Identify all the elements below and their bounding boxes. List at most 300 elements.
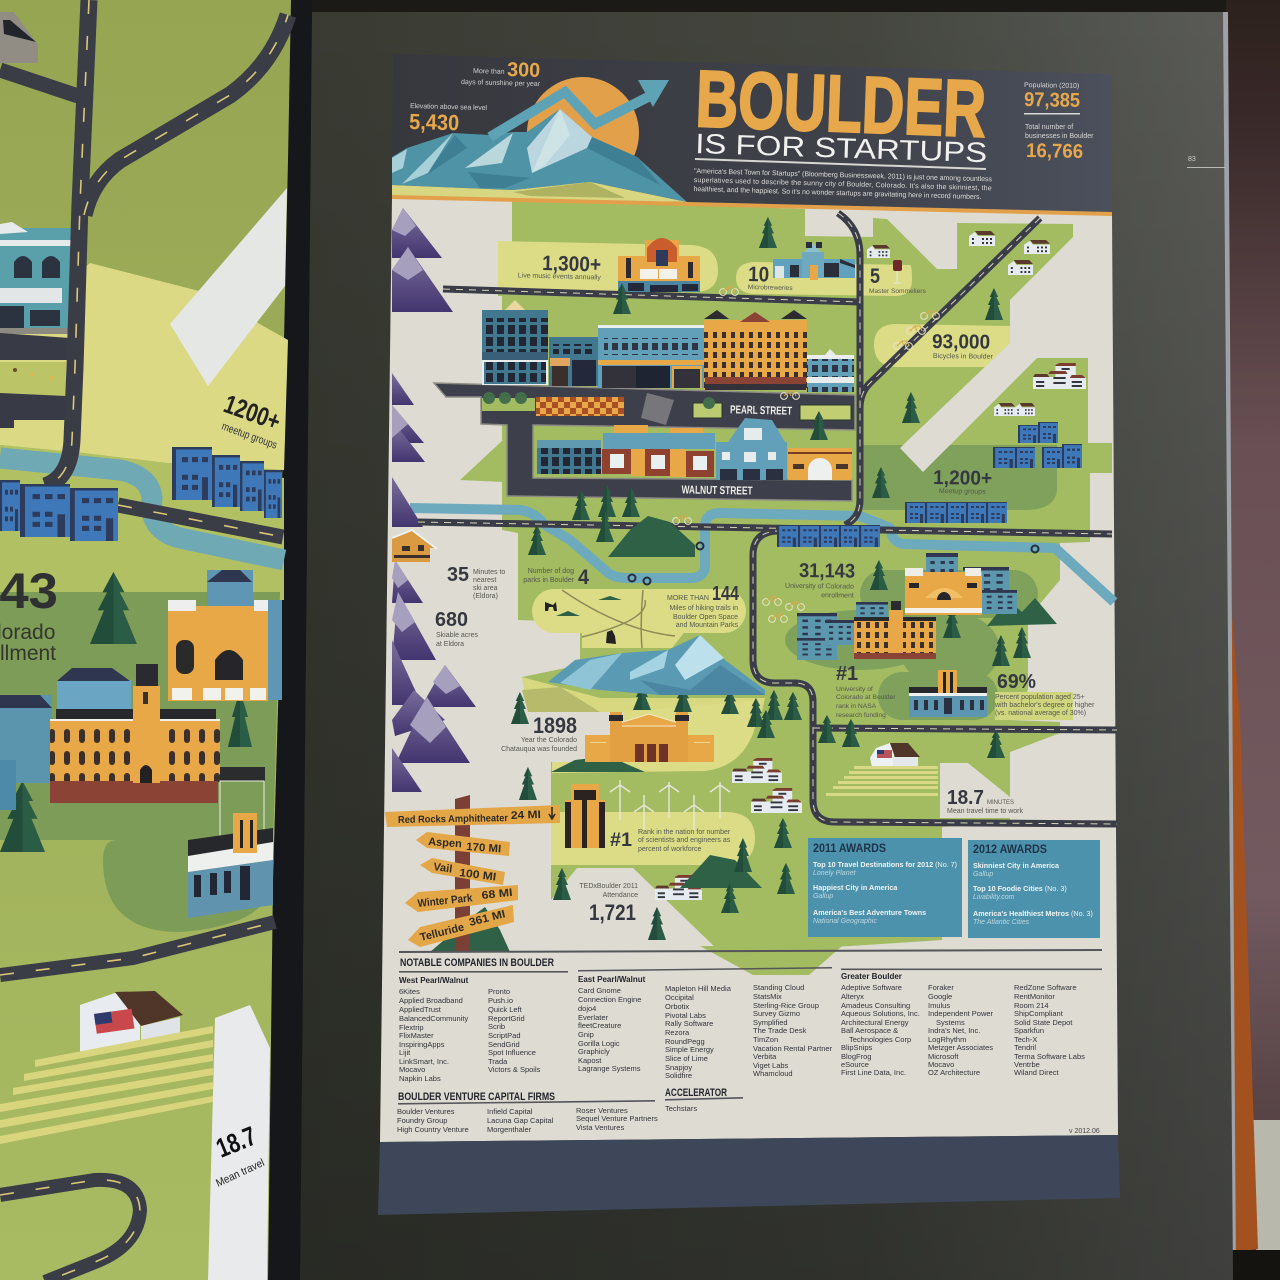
company list: east pearl one: dojo4 (578, 1004, 596, 1013)
field stripes (826, 766, 938, 796)
header yellow hills (392, 182, 687, 202)
company list: east pearl two: Rezora (665, 1028, 690, 1037)
company list: greater one: First Line Data, Inc. (841, 1068, 906, 1077)
yellow hill on left page (0, 263, 288, 470)
panel: venture capital firms: Morgenthaler (487, 1125, 532, 1134)
panel: venture capital firms: BOULDER VENTURE CAPITAL FIRMS (398, 1091, 555, 1103)
page number (1187, 156, 1225, 168)
sign: Aspen: 170 MI (466, 841, 502, 855)
panel: poster (378, 54, 1120, 1215)
stat: meetups: Meetup groups (939, 488, 986, 496)
company list: greater two: OZ Architecture (928, 1068, 980, 1077)
stat: NASA funding: research funding (836, 712, 886, 719)
company list: east pearl three: Standing Cloud (753, 983, 804, 992)
purple mountains (392, 208, 476, 792)
title: IS FOR STARTUPS (695, 128, 988, 168)
stat: sommeliers (869, 265, 926, 295)
dog park area (532, 589, 746, 648)
sign: Vail: 100 MI (459, 867, 497, 883)
enrollment stat fragment: llment (0, 642, 56, 665)
population stat: 97,385 (1024, 89, 1080, 112)
pearl street plaza (482, 392, 851, 440)
intro paragraph: healthiest, and the happiest. So it's no wonder startups are gravitating here in record numbers. (693, 186, 982, 201)
company list: greater two: Mocavo (928, 1060, 954, 1069)
stat: hiking trails: and Mountain Parks (676, 622, 738, 629)
elevation stat: 5,430 (409, 109, 460, 135)
stat: skiable acres: 680 (435, 609, 468, 631)
company list: east pearl three: Survey Gizmo (753, 1009, 800, 1018)
company list: greater two: Metzger Associates (928, 1043, 993, 1052)
evergreen trees (511, 217, 1031, 940)
yellow pill: breweries and sommeliers (736, 262, 912, 296)
stat: NASA funding: Colorado at Boulder (836, 694, 896, 701)
company list: east pearl three: Symplified (753, 1018, 788, 1027)
company list: greater two: Imulus (928, 1001, 950, 1010)
panel: venture capital firms: High Country Venture (397, 1125, 469, 1134)
page number: 83 (1188, 156, 1196, 163)
panel: 2012 awards (968, 840, 1100, 938)
company list: west pearl two: Push.io (488, 996, 513, 1005)
sunshine stat (461, 59, 541, 88)
brewery (773, 242, 855, 280)
stat: live music: 1,300+ (542, 252, 601, 277)
stat: degree attainment (994, 671, 1095, 717)
header mountains (392, 109, 687, 202)
company list: east pearl two: Orbotix (665, 1002, 689, 1011)
sign: Winter Park: 68 MI (481, 887, 513, 902)
left page side street (0, 393, 66, 428)
elevation stat (409, 103, 488, 135)
stat: hiking trails: 144 (712, 583, 740, 605)
stat: TEDx: Attendance (603, 892, 638, 899)
sign: Red Rocks (385, 805, 560, 827)
intro paragraph (693, 168, 993, 201)
panel: 2012 awards: Top 10 Foodie Cities (No. 3) (973, 884, 1067, 893)
company list: east pearl two: Solidfire (665, 1071, 692, 1080)
company list: greater one: BlipSnips (841, 1043, 873, 1052)
river left page (0, 458, 284, 560)
company list: west pearl two: Pronto (488, 987, 510, 996)
castle building left page (168, 570, 282, 701)
company list: east pearl two: Slice of Lime (665, 1054, 708, 1063)
stat: TEDx (579, 883, 638, 925)
company list: greater one: Architectural Energy (841, 1018, 909, 1027)
header growth arrow (490, 80, 669, 137)
panel: 2011 awards: Happiest City in America (813, 883, 898, 892)
company list: west pearl one: Mocavo (399, 1065, 425, 1074)
heading: notable companies: NOTABLE COMPANIES IN BOULDER (400, 957, 554, 969)
heading: east pearl: East Pearl/Walnut (578, 975, 646, 984)
bikes (673, 287, 939, 622)
1200+ stat: 1200+ (220, 388, 285, 436)
company list: west pearl one: InspiringApps (399, 1040, 445, 1049)
river (410, 508, 1114, 602)
businesses stat (1025, 124, 1094, 163)
yellow band: workforce rank (551, 812, 755, 865)
title: BOULDER (694, 54, 987, 154)
green strip behind Walnut buildings (536, 428, 853, 478)
stat: degree attainment: with bachelor's degree or higher (994, 702, 1095, 709)
stat: NASA funding: rank in NASA (836, 703, 877, 710)
dark right book page (300, 12, 1233, 1280)
stat: travel time: Mean travel time to work (947, 808, 1024, 815)
population stat (1024, 82, 1080, 114)
Pearl and Walnut street block (434, 383, 855, 501)
stat: hiking trails: Miles of hiking trails in (670, 605, 738, 612)
poster bottom strip (378, 1135, 1120, 1215)
stat: hiking trails: Boulder Open Space (673, 614, 738, 621)
panel: venture capital firms: Infield Capital (487, 1107, 533, 1116)
barn (870, 743, 920, 767)
panel: accelerator: ACCELERATOR (665, 1087, 727, 1099)
panel: accelerator: Techstars (665, 1104, 697, 1113)
stat: microbreweries: 10 (748, 263, 769, 287)
field stripes (0, 1026, 213, 1144)
travel time stat left page: 18.7 (212, 1121, 260, 1164)
poster paper (380, 197, 1118, 1142)
roads left page (0, 0, 288, 1280)
company list: west pearl one: Napkin Labs (399, 1074, 441, 1083)
stat: NASA funding: #1 (836, 663, 858, 685)
sign: Telluride: Telluride (419, 921, 465, 944)
light notch behind travel time (940, 763, 1010, 818)
teal building (0, 222, 72, 334)
company list: west pearl one: Flextrip (399, 1023, 424, 1032)
panel: left page map (0, 0, 291, 1280)
panel: notable companies (399, 957, 1102, 1083)
businesses stat: businesses in Boulder (1025, 133, 1094, 140)
stat: degree attainment: Percent population aged 25+ (995, 694, 1085, 701)
sign: Telluride: 361 MI (468, 908, 507, 929)
Walnut Street buildings (537, 418, 852, 480)
company list: east pearl one: Connection Engine (578, 995, 641, 1004)
stat: TEDx: TEDxBoulder 2011 (579, 883, 638, 890)
version label: v 2012.06 (1069, 1128, 1100, 1135)
lower green ground band (0, 445, 284, 600)
left page plaza (0, 362, 66, 398)
old main (797, 601, 936, 660)
stat: enrollment (785, 560, 855, 600)
company list: west pearl two: Scrib (488, 1022, 505, 1031)
white travel time panel (208, 1005, 270, 1280)
stat: travel time: 18.7 (947, 787, 984, 809)
ski lodge (392, 530, 437, 562)
ring markers on river (628, 542, 1038, 584)
company list: east pearl two: Rally Software (665, 1019, 713, 1028)
stat: workforce rank (610, 829, 731, 853)
rule above companies (399, 949, 1102, 953)
company list: east pearl one: Card Gnome (578, 986, 621, 995)
company list: greater three: Tech-X (1014, 1035, 1037, 1044)
company list: greater three: RedZone Software (1014, 983, 1077, 992)
panel: 2011 awards: 2011 AWARDS (813, 841, 886, 855)
company list: greater one: Ball Aerospace & (841, 1026, 898, 1035)
panel: 2011 awards (808, 838, 962, 937)
sunshine stat: days of sunshine per year (461, 79, 541, 88)
sign: Aspen: Aspen (428, 836, 462, 850)
campus shade areas (785, 570, 1038, 720)
campus buildings (905, 553, 1017, 615)
sign: Telluride (408, 905, 514, 947)
stat: ski distance: (Eldora) (473, 593, 498, 600)
company list: west pearl one: LinkSmart, Inc. (399, 1057, 449, 1066)
company list: west pearl one: Lijit (399, 1048, 411, 1057)
company list: east pearl three: Sterling-Rice Group (753, 1001, 819, 1010)
stat: NASA funding: University of (836, 686, 873, 693)
stat: live music: Live music events annually (518, 272, 601, 282)
yellow pill: live music (498, 241, 718, 292)
company list: east pearl two: RoundPegg (665, 1037, 705, 1046)
sunshine stat: More than (473, 68, 505, 76)
panel: 2012 awards: The Atlantic Cities (973, 919, 1030, 926)
theater (618, 238, 700, 292)
company list: east pearl three: Verbita (753, 1052, 777, 1061)
company list: greater one: BlogFrog (841, 1052, 871, 1061)
stat: sommeliers: Master Sommeliers (869, 288, 926, 295)
stat: dog parks: parks in Boulder (523, 577, 575, 584)
map ground green (460, 199, 1112, 975)
stat: ski distance: ski area (473, 585, 498, 592)
company list: east pearl two: Occipital (665, 993, 694, 1002)
old main building left page (0, 664, 220, 810)
heading: west pearl: West Pearl/Walnut (399, 976, 469, 985)
stat: dog parks (523, 566, 589, 589)
company list: east pearl one: fleetCreature (578, 1021, 621, 1030)
company list: greater three: Ventrbe (1014, 1060, 1040, 1069)
stat: enrollment: 31,143 (799, 560, 855, 583)
company list: east pearl two: Simple Energy (665, 1045, 714, 1054)
barn with flag (80, 991, 183, 1052)
panel: 2012 awards: 2012 AWARDS (973, 842, 1047, 856)
title rule (695, 158, 986, 170)
panel: venture capital firms: Foundry Group (397, 1116, 447, 1125)
dark green meetup area (863, 445, 1057, 510)
company list: east pearl two: Mapleton Hill Media (665, 984, 732, 993)
heading: greater boulder: Greater Boulder (841, 972, 902, 981)
museum building left page (188, 767, 273, 918)
east-west road and network (418, 213, 1117, 824)
panel: 2011 awards: Gallup (813, 893, 833, 900)
stat: ski distance: Minutes to (473, 569, 505, 576)
company list: greater three: RentMonitor (1014, 992, 1055, 1001)
company list: east pearl one: Lagrange Systems (578, 1064, 641, 1073)
book gutter shadow (262, 0, 312, 1280)
Chautauqua auditorium (585, 712, 714, 762)
stat: workforce rank: of scientists and engineers as (638, 837, 731, 844)
stat: workforce rank: percent of workforce (638, 846, 702, 853)
company list: greater one: Technologies Corp (849, 1035, 911, 1044)
stat: dog parks: 4 (578, 566, 589, 589)
panel: 2012 awards: Livability.com (973, 894, 1015, 901)
company list: west pearl two: Trada (488, 1057, 508, 1066)
signpost (385, 795, 560, 952)
stat: ski distance: nearest (473, 577, 496, 584)
panel: venture capital firms: Roser Ventures (576, 1106, 628, 1115)
stat: ski distance: 35 (447, 564, 469, 586)
header band (392, 54, 1112, 216)
panel: venture capital firms (397, 1091, 658, 1134)
wind turbines (610, 780, 730, 830)
panel: 2012 awards: America's Healthiest Metros (No. 3) (973, 909, 1093, 918)
wine glass (893, 260, 902, 283)
company list: greater three: Solid State Depot (1014, 1018, 1073, 1027)
intro paragraph: superlatives used to describe the sunny city of Boulder, Colorado. It's also the skinniest, the (694, 177, 992, 192)
company list: west pearl two: Quick Left (488, 1005, 523, 1014)
company list: west pearl one: BalancedCommunity (399, 1014, 468, 1023)
stat: hiking trails (667, 583, 740, 629)
company list: greater one: eSource (841, 1060, 869, 1069)
stat: Chautauqua: 1898 (533, 713, 577, 738)
company list: west pearl two: Victors & Spoils (488, 1065, 541, 1074)
stat: degree attainment: 69% (997, 671, 1036, 693)
1200+ stat: meetup groups (220, 421, 279, 452)
stat: hiking trails: MORE THAN (667, 595, 709, 602)
sign: Vail: Vail (433, 861, 453, 876)
company list: greater three: ShipCompliant (1014, 1009, 1064, 1018)
white diagonal wedge (170, 188, 287, 386)
stat: microbreweries: Microbreweries (748, 284, 793, 292)
stat: travel time (947, 787, 1024, 815)
panel: 2011 awards: America's Best Adventure Towns (813, 908, 926, 917)
foothill mountains (548, 635, 765, 695)
stat: workforce rank: #1 (610, 830, 632, 851)
company list: east pearl three: TimZon (753, 1035, 778, 1044)
panel: 2012 awards: Gallup (973, 871, 993, 878)
stat: skiable acres (435, 609, 479, 648)
stat: sommeliers: 5 (870, 265, 880, 288)
company list: greater one: Aqueous Solutions, Inc. (841, 1009, 920, 1018)
stat: skiable acres: Skiable acres (436, 632, 479, 639)
company list: west pearl two: Spot Influence (488, 1048, 536, 1057)
sign: Red Rocks: 24 MI (511, 809, 541, 822)
stat: NASA funding (836, 663, 896, 719)
company list: east pearl two: Snapjoy (665, 1063, 692, 1072)
road dashes left page (0, 0, 288, 1280)
stat: enrollment: University of Colorado (785, 583, 854, 591)
research building (565, 784, 605, 848)
company list: greater two: Independent Power (928, 1009, 994, 1018)
Pearl Street buildings (482, 300, 854, 392)
stat: Chautauqua (501, 713, 577, 753)
left page street (0, 333, 70, 360)
panel: 2011 awards: Lonely Planet (813, 870, 856, 877)
company list: greater three: Tendril (1014, 1043, 1036, 1052)
businesses stat: 16,766 (1026, 140, 1083, 163)
stat: enrollment: enrollment (821, 592, 854, 600)
company list: east pearl one: Gnip (578, 1030, 594, 1039)
green hills (430, 516, 1057, 952)
company list: east pearl one: Everlater (578, 1013, 609, 1022)
population stat: Population (2010) (1024, 82, 1079, 90)
trees left page (0, 572, 252, 852)
panel: venture capital firms: Sequel Venture Partners (576, 1114, 658, 1123)
panel: 2011 awards: National Geographic (813, 918, 877, 925)
Chautauqua yellow hill (522, 677, 765, 773)
stat: Chautauqua: Year the Colorado (521, 737, 577, 744)
dog park trails and dogs (545, 590, 675, 648)
company list: west pearl two: ScriptPad (488, 1031, 521, 1040)
road dashes (418, 213, 1117, 824)
company list: greater two: Foraker (928, 983, 954, 992)
blue apartments (777, 422, 1082, 547)
stat: TEDx: 1,721 (589, 900, 636, 925)
stat: skiable acres: at Eldora (436, 641, 464, 648)
yellow pill: bicycles (874, 324, 1010, 367)
company list: greater two: Indra's Net, Inc. (928, 1026, 980, 1035)
company list: greater three: Sparkfun (1014, 1026, 1044, 1035)
company list: west pearl two: ReportGrid (488, 1014, 525, 1023)
stat: live music (518, 251, 602, 282)
orange divider (392, 195, 1112, 216)
panel: accelerator (665, 1087, 743, 1113)
company list: greater two: Systems (936, 1018, 965, 1027)
company list: greater one: Amadeus Consulting (841, 1001, 910, 1010)
travel time stat left page (212, 1121, 266, 1190)
Pearl Street label: PEARL STREET (730, 404, 792, 418)
stat: Chautauqua: Chatauqua was founded (501, 746, 577, 753)
houses top right (655, 231, 1086, 900)
stat: workforce rank: Rank in the nation for number (638, 829, 731, 836)
panel: venture capital firms: Boulder Ventures (397, 1107, 455, 1116)
yellow bg behind education stat (995, 692, 1073, 720)
header sun (527, 77, 639, 189)
company list: greater three: Room 214 (1014, 1001, 1049, 1010)
sunshine stat: 300 (507, 59, 540, 82)
campus shade (0, 592, 280, 932)
panel: 2011 awards: Top 10 Travel Destinations for 2012 (No. 7) (813, 860, 957, 869)
panel: 2012 awards: Skinniest City in America (973, 861, 1060, 870)
top grey building (0, 12, 38, 63)
company list: east pearl three: Viget Labs (753, 1061, 789, 1070)
businesses stat: Total number of (1025, 124, 1073, 131)
sign: Winter Park (405, 885, 518, 912)
apartment rows (0, 447, 282, 541)
sign: Aspen (416, 832, 510, 856)
company list: west pearl one: Applied Broadband (399, 996, 463, 1005)
company list: greater three: Wiland Direct (1014, 1068, 1060, 1077)
title (694, 54, 988, 168)
company list: east pearl three: StatsMix (753, 992, 782, 1001)
company list: greater two: Google (928, 992, 952, 1001)
heading: east pearl (578, 967, 832, 984)
mountain snow caps (392, 208, 460, 743)
company list: greater three: Terma Software Labs (1014, 1052, 1085, 1061)
company list: east pearl three: Vacation Rental Partner (753, 1044, 833, 1053)
company list: greater one: Alteryx (841, 992, 864, 1001)
sign: Red Rocks: Red Rocks Amphitheater (398, 813, 508, 826)
elevation stat: Elevation above sea level (410, 103, 488, 112)
light diagonal strip (900, 343, 1037, 472)
company list: east pearl two: Pivotal Labs (665, 1011, 706, 1020)
stat: bicycles: 93,000 (932, 331, 990, 354)
sign: Winter Park: Winter Park (417, 892, 474, 910)
stat: dog parks: Number of dog (528, 568, 574, 575)
company list: greater one: Adeptive Software (841, 983, 902, 992)
intro paragraph: "America's Best Town for Startups" (Bloomberg Businessweek, 2011) is just one among countless (694, 168, 993, 183)
company list: east pearl three: The Trade Desk (753, 1026, 807, 1035)
travel time stat left page: Mean travel (214, 1157, 266, 1190)
company list: west pearl one: 6Kites (399, 987, 420, 996)
company list: west pearl one: AppliedTrust (399, 1005, 442, 1014)
company list: west pearl one: FlixMaster (399, 1031, 434, 1040)
stat: degree attainment: (vs. national average of 30%) (995, 710, 1086, 717)
company list: greater two: Microsoft (928, 1052, 959, 1061)
company list: west pearl two: SendGrid (488, 1040, 520, 1049)
museum building (909, 670, 987, 717)
stat: travel time: MINUTES (987, 800, 1014, 806)
company list: east pearl one: Gorilla Logic (578, 1039, 620, 1048)
company list: east pearl one: Graphicly (578, 1047, 610, 1056)
